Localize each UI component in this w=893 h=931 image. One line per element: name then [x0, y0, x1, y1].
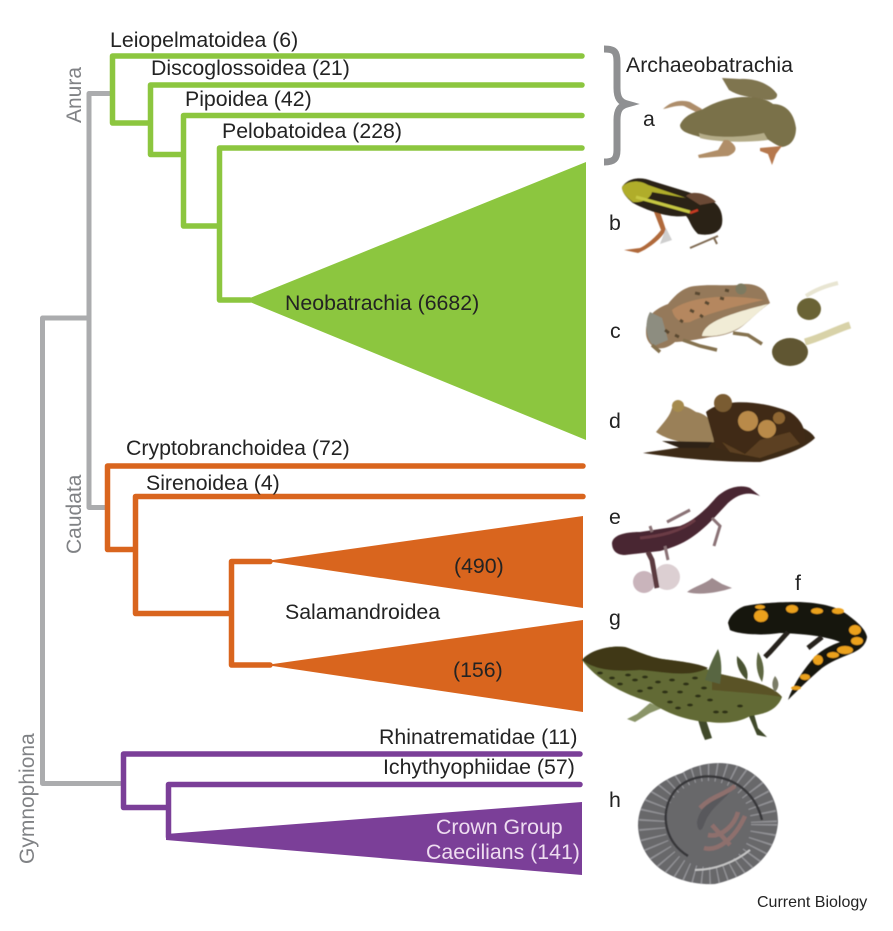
panel letters: [609, 107, 801, 812]
credit: Current Biology: Current Biology: [757, 894, 867, 911]
taxon labels: Pelobatoidea (228): [222, 119, 402, 143]
taxon labels: Archaeobatrachia: [626, 53, 793, 77]
panel letters: a: [643, 107, 655, 131]
icon: frog b: [622, 178, 722, 253]
wedge: Crown Group Caecilians: [166, 802, 582, 875]
clade labels: [16, 67, 86, 864]
taxon labels: Cryptobranchoidea (72): [126, 436, 350, 460]
panel letters: c: [610, 319, 621, 343]
taxon labels: Ichythyophiidae (57): [383, 755, 575, 779]
clade: Caudata tree: [108, 466, 583, 712]
clade: Gymnophiona tree: [124, 754, 582, 875]
icon: salamander e with eggs: [612, 486, 760, 594]
backbone: grey tree branches: [42, 94, 120, 784]
taxon labels: Caecilians (141): [426, 840, 580, 864]
taxon labels: (490): [454, 554, 504, 578]
taxon labels: Salamandroidea: [285, 600, 440, 624]
panel letters: e: [609, 505, 621, 529]
panel letters: g: [609, 606, 621, 630]
bracket: Archaeobatrachia: [604, 49, 627, 162]
panel letters: b: [609, 211, 621, 235]
icon: frog c and tadpoles: [646, 283, 850, 366]
icon: fire salamander f: [728, 602, 867, 700]
icon: axolotl g: [582, 647, 782, 740]
taxon labels: Rhinatrematidae (11): [379, 725, 577, 749]
icon: frog a: [663, 78, 796, 165]
taxon labels: Sirenoidea (4): [146, 471, 280, 495]
taxon labels: Pipoidea (42): [185, 87, 312, 111]
taxon labels: [110, 28, 793, 864]
label: Caudata: Caudata: [63, 474, 86, 554]
panel letters: d: [609, 409, 621, 433]
taxon labels: (156): [453, 658, 503, 682]
panel letters: f: [795, 571, 801, 595]
icon: caecilian h: [638, 763, 778, 884]
panel letters: h: [609, 788, 621, 812]
taxon labels: Crown Group: [436, 815, 563, 839]
wedge: Salamandroidea lower: [266, 620, 583, 712]
clade: Anura tree: [112, 56, 586, 440]
label: Gymnophiona: Gymnophiona: [16, 733, 39, 864]
wedge: Neobatrachia: [245, 162, 586, 440]
taxon labels: Neobatrachia (6682): [285, 291, 479, 315]
taxon labels: Leiopelmatoidea (6): [110, 28, 298, 52]
icon: frog d with eggs: [643, 394, 815, 462]
taxon labels: Discoglossoidea (21): [151, 56, 350, 80]
wedge: Salamandroidea upper: [266, 516, 583, 608]
label: Anura: Anura: [63, 67, 86, 123]
